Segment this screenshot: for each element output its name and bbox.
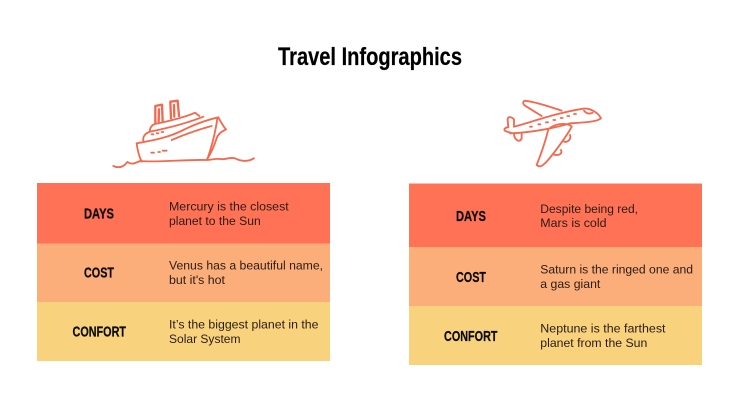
row: cost: Venus has a beautiful name,	[169, 258, 323, 272]
row: cost: but it's hot	[169, 273, 226, 287]
row: days: DAYS	[456, 208, 486, 225]
row: confort	[37, 302, 330, 361]
icon: cruise ship	[113, 101, 254, 167]
row: days: Mercury is the closest	[169, 200, 289, 214]
row: days	[409, 184, 702, 247]
row: days	[37, 183, 330, 244]
row: confort: It’s the biggest planet in the	[169, 318, 319, 332]
row: cost: a gas giant	[540, 277, 601, 291]
row: confort: planet from the Sun	[540, 336, 647, 350]
row: cost	[37, 244, 330, 302]
panel: plane table	[409, 184, 702, 365]
row: confort: CONFORT	[444, 328, 498, 345]
row: cost: COST	[456, 269, 486, 286]
row: cost	[409, 247, 702, 306]
row: days: Despite being red,	[540, 202, 638, 216]
panel: ship table	[37, 183, 330, 361]
row: confort: CONFORT	[72, 324, 126, 340]
row: days: DAYS	[84, 206, 114, 222]
row: cost: COST	[84, 264, 114, 282]
row: cost: Saturn is the ringed one and	[540, 262, 693, 276]
row: confort: Neptune is the farthest	[540, 322, 666, 336]
row: confort: Solar System	[169, 332, 240, 346]
row: confort	[409, 306, 702, 365]
row: days: planet to the Sun	[169, 214, 261, 228]
title: Travel Infographics	[278, 43, 462, 71]
icon: airplane	[504, 101, 601, 166]
row: days: Mars is cold	[540, 216, 607, 230]
